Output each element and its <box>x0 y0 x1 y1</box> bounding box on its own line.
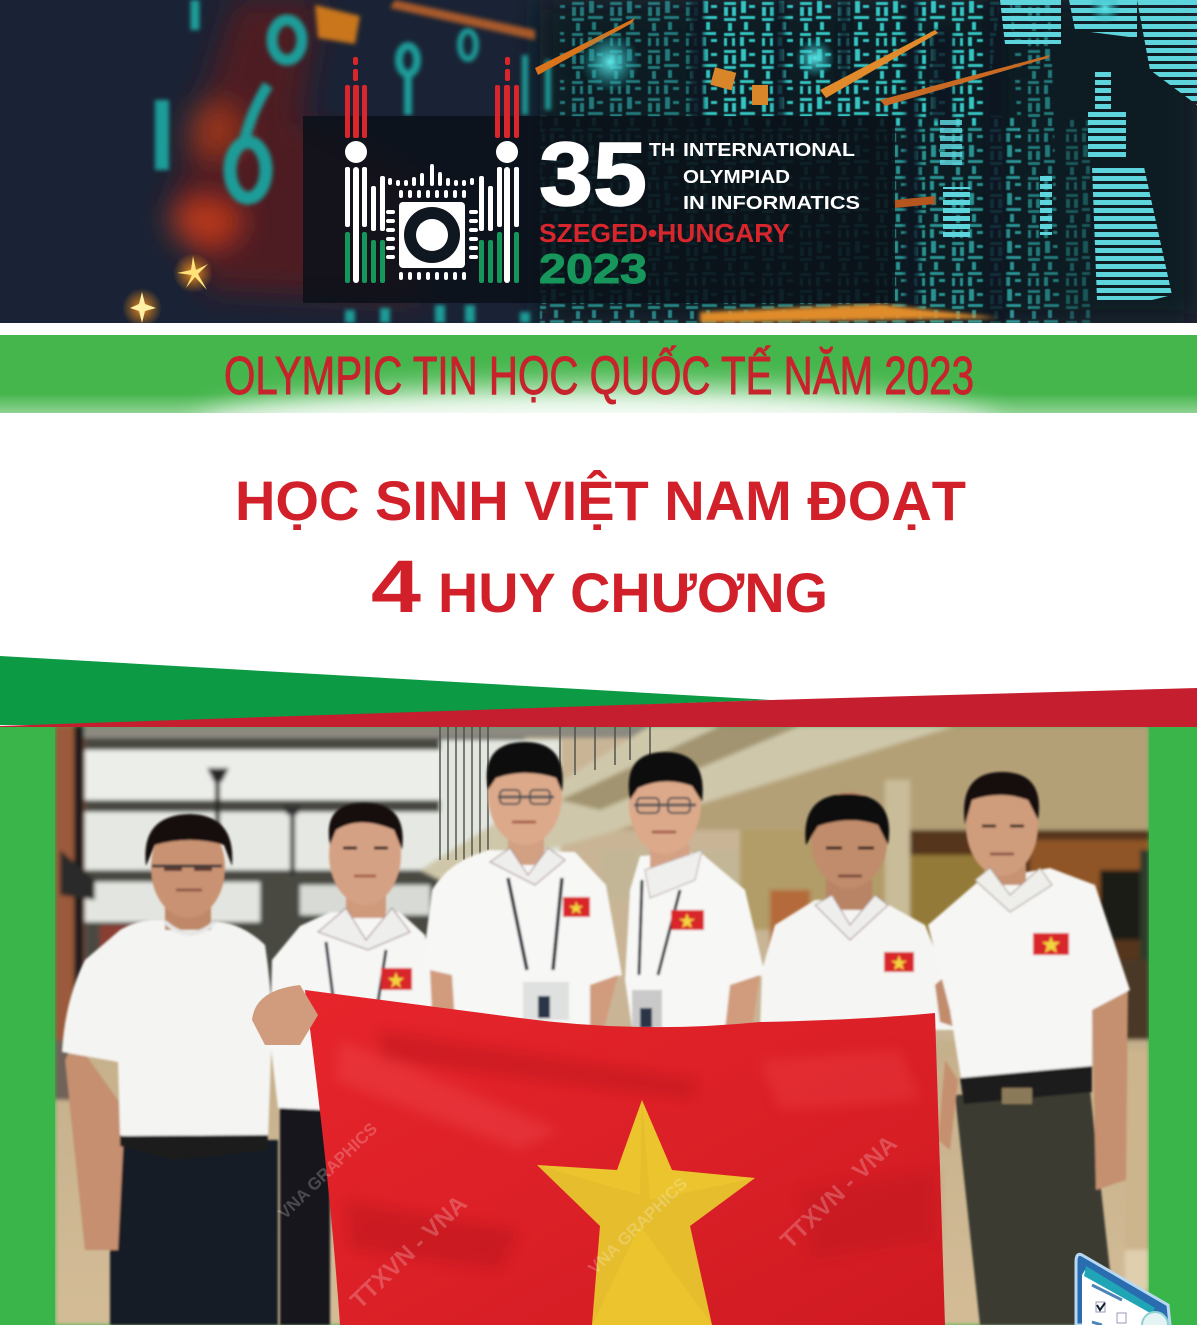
watermarks <box>275 1119 903 1314</box>
logo text: OLYMPIAD: OLYMPIAD <box>683 167 790 187</box>
ribbon: red wedge <box>0 688 1197 727</box>
background: beige ceiling <box>600 726 1149 830</box>
logo: green bars <box>345 232 519 283</box>
orange blocks and streaks <box>315 0 1050 323</box>
person 2: student <box>270 803 440 1325</box>
green side panels <box>0 726 1197 1325</box>
logo text: TH: TH <box>649 140 675 160</box>
person 4: student <box>625 752 765 1030</box>
icon: laptop with quiz checklist <box>1076 1254 1170 1325</box>
logo text: IN INFORMATICS: IN INFORMATICS <box>683 193 860 213</box>
logo: chip pins <box>386 190 478 280</box>
title line 2: number: 4 <box>371 545 421 628</box>
person 3: student <box>422 742 622 1030</box>
logo text: 2023: 2023 <box>539 245 647 292</box>
photo background: hall <box>55 726 1149 1325</box>
watermarks: TTXVN - VNA <box>775 1130 903 1254</box>
team photo <box>55 726 1149 1325</box>
main title <box>235 469 966 628</box>
person 5: student <box>760 792 968 1030</box>
person 6: man right <box>928 772 1130 1325</box>
logo: equalizer <box>388 164 474 186</box>
large striped glyphs <box>940 0 1197 300</box>
watermarks: TTXVN - VNA <box>345 1190 473 1314</box>
code matrix <box>540 0 1090 323</box>
stars <box>173 253 213 293</box>
banner: digital code background <box>0 0 1197 328</box>
watermarks: VNA GRAPHICS <box>275 1119 381 1223</box>
dark gaps in matrix <box>690 0 1005 323</box>
IOI logo <box>345 57 519 283</box>
title line 2: words: HUY CHƯƠNG <box>438 561 828 624</box>
railings <box>440 726 650 860</box>
people <box>62 742 1130 1325</box>
logo: chip core <box>399 202 465 268</box>
logo text: INTERNATIONAL: INTERNATIONAL <box>683 140 855 160</box>
watermarks: VNA GRAPHICS <box>585 1174 691 1278</box>
red blurred glow <box>170 0 420 300</box>
person 1: man left <box>62 814 278 1325</box>
hand on flag <box>252 985 318 1045</box>
title line 1: HỌC SINH VIỆT NAM ĐOẠT <box>235 469 966 532</box>
flag star <box>537 1100 755 1325</box>
logo text: Szeged Hungary: SZEGED•HUNGARY <box>539 218 790 248</box>
logo backdrop panel <box>303 116 895 303</box>
logo: white dots <box>345 141 518 163</box>
ribbon: green wedge <box>0 656 771 725</box>
logo text: 35: 35 <box>539 125 647 225</box>
Vietnamese flag <box>252 985 945 1325</box>
logo: white bars <box>345 167 519 283</box>
teal glow spots <box>580 32 640 92</box>
blurred teal digits <box>162 0 548 323</box>
logo: red bars <box>345 57 519 138</box>
green gradient band <box>0 335 1197 470</box>
